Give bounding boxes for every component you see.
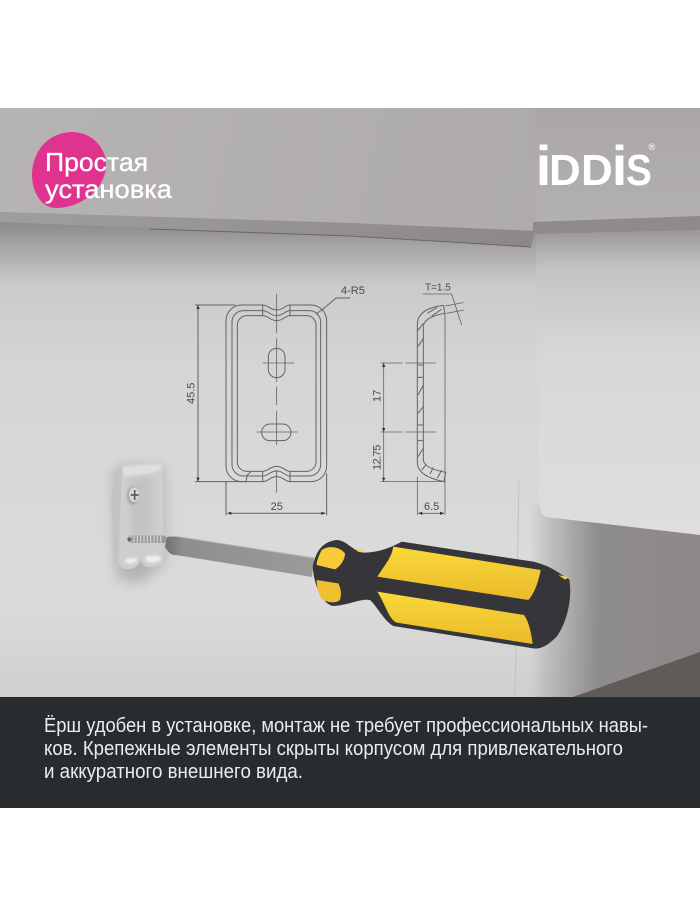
heading: установка [45, 174, 173, 204]
lower wall [0, 108, 700, 697]
dimension labels [372, 283, 451, 513]
badge: simple installation [32, 132, 173, 208]
dimension labels: 6.5 [424, 501, 439, 513]
handle [313, 540, 570, 649]
label: 4-R5: 4-R5 [341, 285, 365, 297]
technical drawing: side view of bracket [372, 283, 464, 515]
screwdriver [165, 536, 570, 649]
logo: iddis: i [536, 134, 551, 197]
logo: iddis: D [581, 146, 613, 195]
caption text: и аккуратного внешнего вида. [44, 761, 303, 783]
right lower panel [536, 262, 700, 535]
right upper panel [535, 108, 700, 222]
dimension labels: T=1.5 [425, 283, 451, 294]
dimension labels [185, 383, 283, 513]
photo background: wall and shelves [0, 108, 700, 697]
logo: iddis [536, 134, 656, 197]
plate highlights and recess [123, 464, 161, 477]
caption band [0, 697, 700, 808]
dimension labels: 17 [372, 390, 384, 402]
dimension labels: 12.75 [372, 445, 384, 470]
logo: iddis: i [612, 134, 627, 197]
dimension labels: 25 [271, 501, 283, 513]
logo: iddis: S [626, 145, 652, 195]
pink blob [32, 132, 106, 208]
floor [573, 652, 700, 697]
caption text: ков. Крепежные элементы скрыты корпусом для привлекательного [44, 738, 623, 760]
bracket left fold [112, 467, 122, 565]
dimension labels: 45.5 [185, 383, 197, 404]
dimension lines [195, 298, 350, 515]
wall bracket with screws [112, 462, 167, 583]
lower screw [127, 536, 167, 543]
upper cabinet panel [0, 108, 536, 231]
logo: iddis: ® [648, 142, 656, 152]
top screw [127, 487, 139, 505]
technical drawing: front view of bracket [185, 294, 350, 515]
centre lines [257, 294, 297, 493]
heading: Простая [45, 147, 148, 177]
bracket contour [226, 305, 327, 482]
logo: iddis: D [549, 146, 581, 195]
bracket plate [118, 462, 164, 569]
side profile [417, 305, 446, 482]
shaft [165, 536, 314, 577]
dimension lines [381, 294, 464, 515]
caption text: Ёрш удобен в установке, монтаж не требует профессиональных навы- [44, 715, 648, 737]
slots [262, 348, 291, 441]
bracket shadow [113, 467, 165, 583]
right lower wall [530, 505, 700, 697]
